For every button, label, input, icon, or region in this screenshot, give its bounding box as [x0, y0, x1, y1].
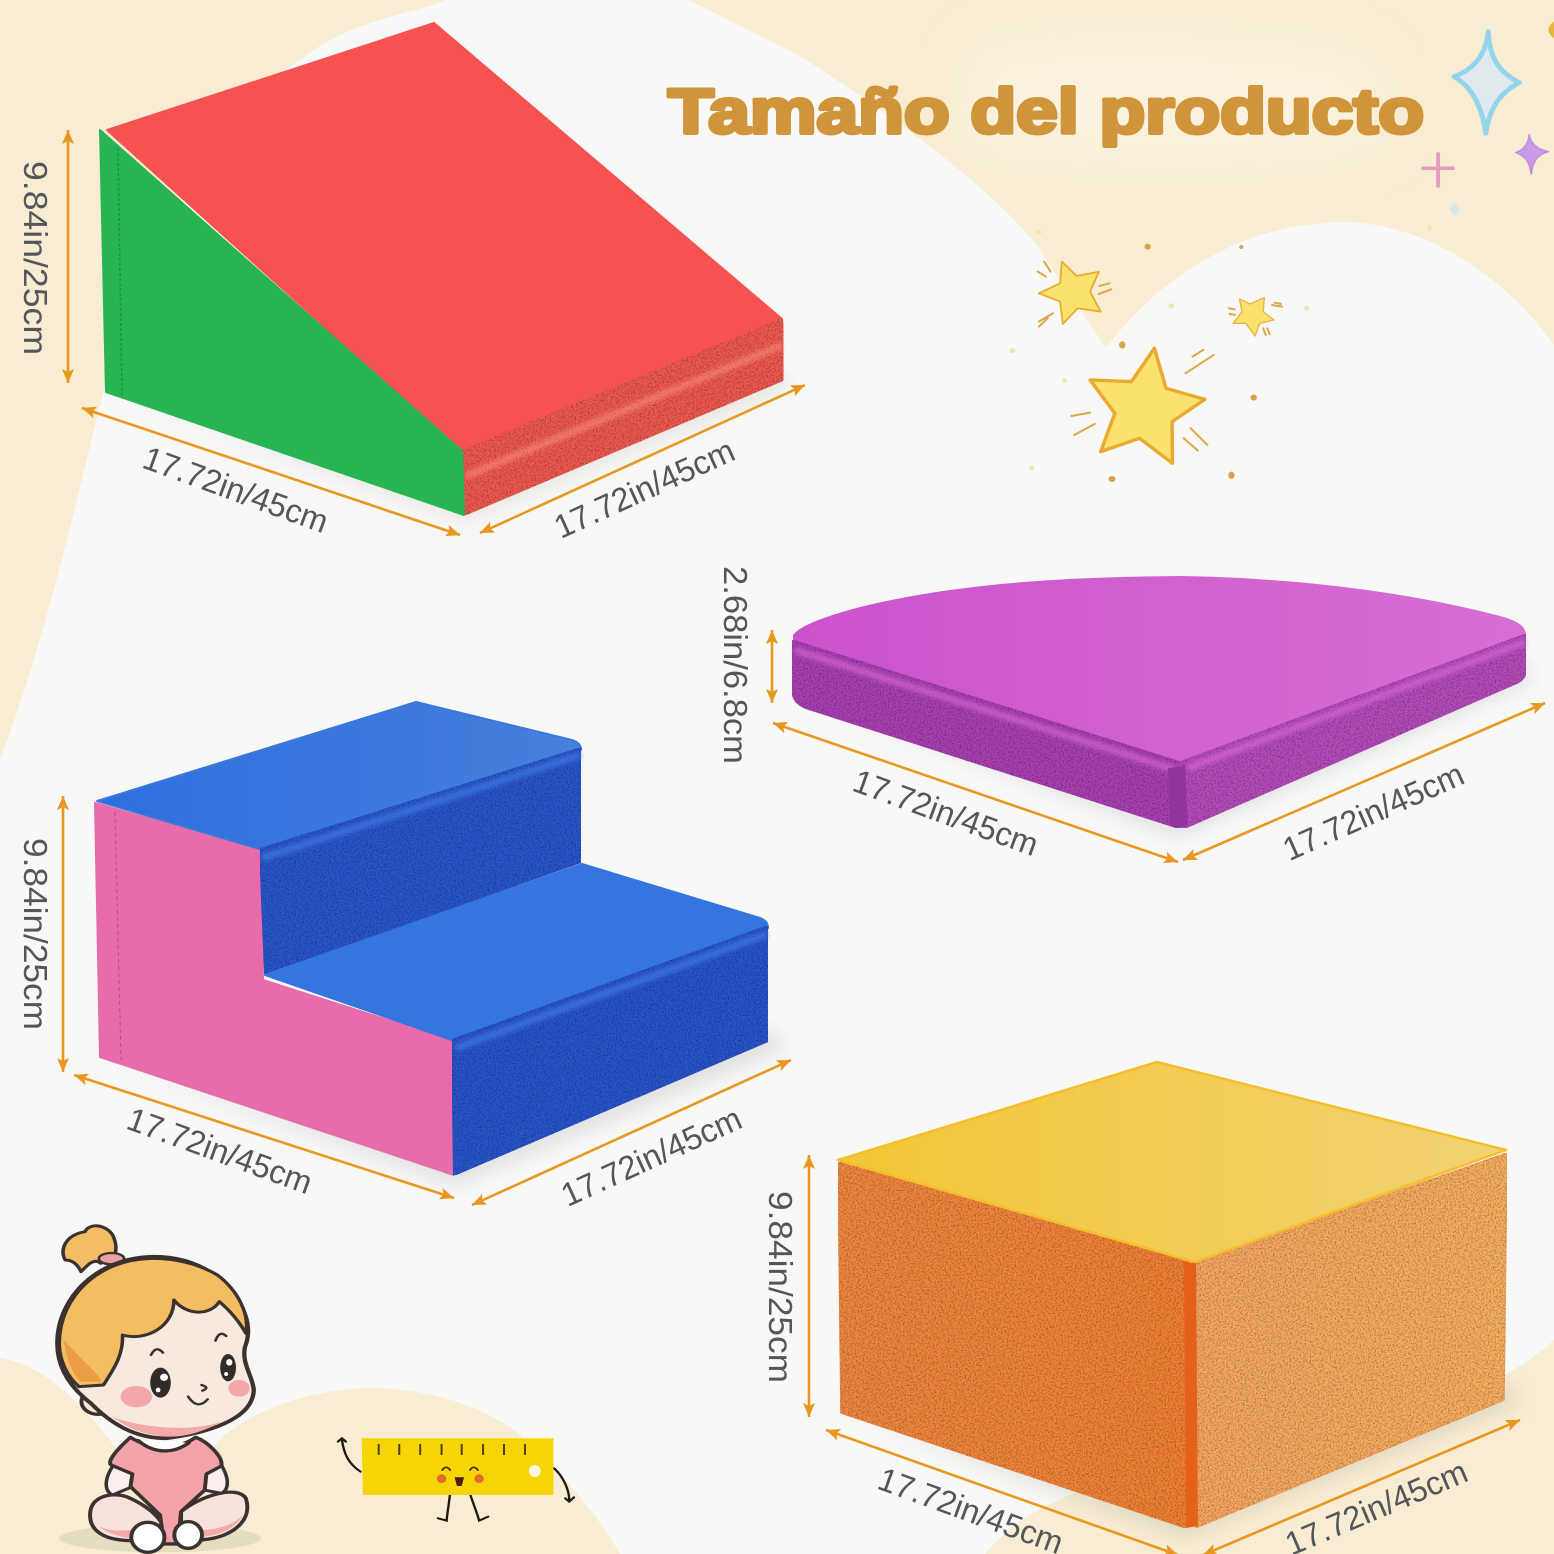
mat right side	[1178, 634, 1526, 828]
baby leg shading	[99, 1515, 243, 1538]
baby arms	[106, 1463, 132, 1495]
wedge seam	[118, 148, 122, 398]
mat front corner	[1168, 766, 1188, 828]
mat shadow	[793, 660, 1530, 835]
dimension arrows: stairs	[63, 796, 791, 1205]
product: stairs	[95, 702, 790, 1185]
baby chin shade	[113, 1417, 221, 1437]
label: wedge width: 17.72in/45cm	[548, 431, 740, 546]
ruler limbs	[338, 1438, 574, 1521]
cube right face	[1195, 1153, 1507, 1528]
wedge side	[100, 130, 464, 515]
icon: baby	[57, 1226, 261, 1552]
baby brows, nose and mouth	[151, 1334, 226, 1404]
label: stairs width: 17.72in/45cm	[555, 1099, 747, 1214]
label: cube height: 9.84in/25cm	[762, 1191, 799, 1383]
title: Tamaño del producto	[668, 77, 1424, 147]
label: mat length: 17.72in/45cm	[848, 762, 1043, 863]
label: mat height: 2.68in/6.8cm	[717, 566, 754, 764]
baby collar	[138, 1441, 189, 1451]
cube top	[838, 1062, 1506, 1262]
label: wedge length: 17.72in/45cm	[138, 439, 333, 540]
decorative sparkles and stars	[1009, 22, 1554, 482]
product: cube	[838, 1062, 1520, 1535]
mat left side	[792, 640, 1180, 828]
stairs edge highlights	[262, 755, 767, 1048]
stairs pink seam	[115, 812, 121, 1060]
ruler ticks	[379, 1444, 525, 1455]
star motion dashes	[1038, 262, 1282, 451]
label: wedge height: 9.84in/25cm	[17, 161, 54, 355]
icon: big star	[1090, 348, 1205, 463]
baby hair	[59, 1258, 247, 1387]
icon: tiny blue sparkle	[1449, 203, 1460, 216]
mat edge highlights	[795, 642, 1525, 770]
stairs upper tread	[97, 702, 581, 849]
wedge shadow	[106, 370, 790, 520]
dimension arrows: mat	[772, 630, 1545, 862]
product: wedge	[100, 23, 790, 520]
baby cheeks	[121, 1380, 250, 1407]
baby hair tie	[99, 1253, 124, 1264]
dots	[1009, 226, 1432, 482]
icon: ruler character	[338, 1438, 574, 1521]
stairs lower riser	[452, 926, 768, 1175]
ruler face	[437, 1467, 484, 1486]
stairs shadow	[100, 1030, 790, 1185]
product: quarter circle mat	[792, 576, 1530, 835]
cube shadow	[842, 1385, 1520, 1535]
wedge edge highlight	[466, 345, 782, 476]
ruler body	[362, 1438, 553, 1495]
cube left face	[838, 1162, 1190, 1528]
stairs lower tread	[265, 864, 768, 1040]
icon: blue sparkle	[1454, 32, 1519, 133]
icon: purple sparkle	[1516, 135, 1548, 174]
baby onesie	[110, 1437, 222, 1544]
label: stairs length: 17.72in/45cm	[122, 1100, 317, 1201]
ruler hole	[529, 1465, 541, 1477]
dimension arrows: wedge	[68, 130, 805, 535]
label: mat width: 17.72in/45cm	[1277, 755, 1469, 868]
baby ear	[81, 1389, 115, 1414]
stairs upper riser	[260, 748, 581, 974]
baby hair shade	[63, 1340, 102, 1382]
baby face	[57, 1257, 254, 1438]
icon: gold sparkle corner	[1549, 22, 1554, 38]
stairs pink side	[95, 803, 454, 1175]
icon: medium star	[1039, 262, 1101, 324]
icon: pink plus sparkle	[1423, 154, 1453, 186]
dimension arrows: cube	[809, 1155, 1520, 1554]
label: stairs height: 9.84in/25cm	[17, 838, 54, 1030]
baby shadow	[59, 1524, 261, 1552]
baby eyes	[150, 1354, 236, 1398]
icon: small star	[1233, 298, 1274, 336]
wedge slope	[107, 23, 782, 451]
baby ponytail	[63, 1226, 116, 1272]
cube corner edge	[1184, 1262, 1198, 1528]
baby legs	[90, 1495, 164, 1541]
mat top	[793, 576, 1526, 762]
baby feet	[131, 1522, 164, 1552]
wedge front face	[462, 319, 783, 515]
